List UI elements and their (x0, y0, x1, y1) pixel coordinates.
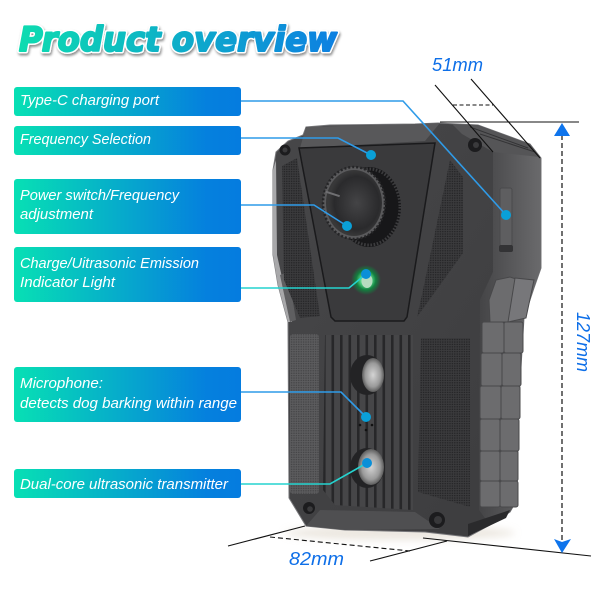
bottom ridges (468, 510, 510, 536)
charging port cover (499, 188, 513, 252)
height arrow (554, 123, 571, 553)
callout: Type-C charging port (14, 87, 511, 220)
microphone holes (359, 420, 373, 431)
product: device body (273, 123, 541, 537)
callout: Frequency Selection (14, 126, 376, 160)
bottom screw right (429, 512, 445, 528)
callout: Indicator light (14, 247, 371, 302)
callout: Indicator light: Indicator Light (20, 274, 116, 291)
top band (300, 123, 440, 148)
right mesh (417, 160, 463, 317)
label: 127mm: 127mm (573, 312, 593, 372)
side grip blocks (480, 277, 534, 507)
callout: Type-C charging port: Type-C charging port (20, 92, 160, 109)
callout: Power switch (14, 179, 352, 234)
lower ultrasonic transmitter (350, 448, 384, 488)
top dial panel (299, 143, 435, 321)
lower left mesh (290, 334, 319, 494)
left shoulder ridges (280, 272, 296, 322)
callout: Indicator light: Charge/Uitrasonic Emission (20, 255, 199, 272)
lower bevel (306, 510, 440, 530)
upper ultrasonic transmitter (350, 355, 384, 395)
left mesh (282, 158, 320, 318)
ground shadow (285, 526, 515, 540)
bottom screw left (303, 502, 315, 514)
callout: Power switch: Power switch/Frequency (20, 187, 180, 204)
callout: Microphone: detects dog barking within range (20, 395, 237, 412)
knob (323, 167, 401, 247)
callout: Frequency Selection: Frequency Selection (20, 131, 151, 148)
lower right mesh (418, 338, 470, 507)
dimension lines (228, 79, 591, 561)
callout: Microphone: Microphone: (20, 375, 103, 392)
right side wall (479, 144, 541, 525)
top ridges (452, 124, 540, 157)
label: 82mm: 82mm (289, 549, 344, 569)
callout: Microphone (14, 367, 371, 422)
left rim (273, 160, 292, 322)
corner screw top right (468, 138, 482, 152)
callout: Dual-core transmitter (14, 458, 372, 498)
corner screw top left (280, 144, 290, 156)
title: Product overview (19, 20, 338, 60)
indicator light (351, 265, 381, 295)
title: Product overview (19, 20, 338, 60)
device outer shell (273, 123, 541, 537)
ribbed sensor panel (323, 335, 413, 510)
callout: Power switch: adjustment (20, 206, 94, 223)
label: 51mm: 51mm (432, 55, 483, 75)
callout: Dual-core transmitter: Dual-core ultrasonic transmitter (20, 476, 229, 493)
